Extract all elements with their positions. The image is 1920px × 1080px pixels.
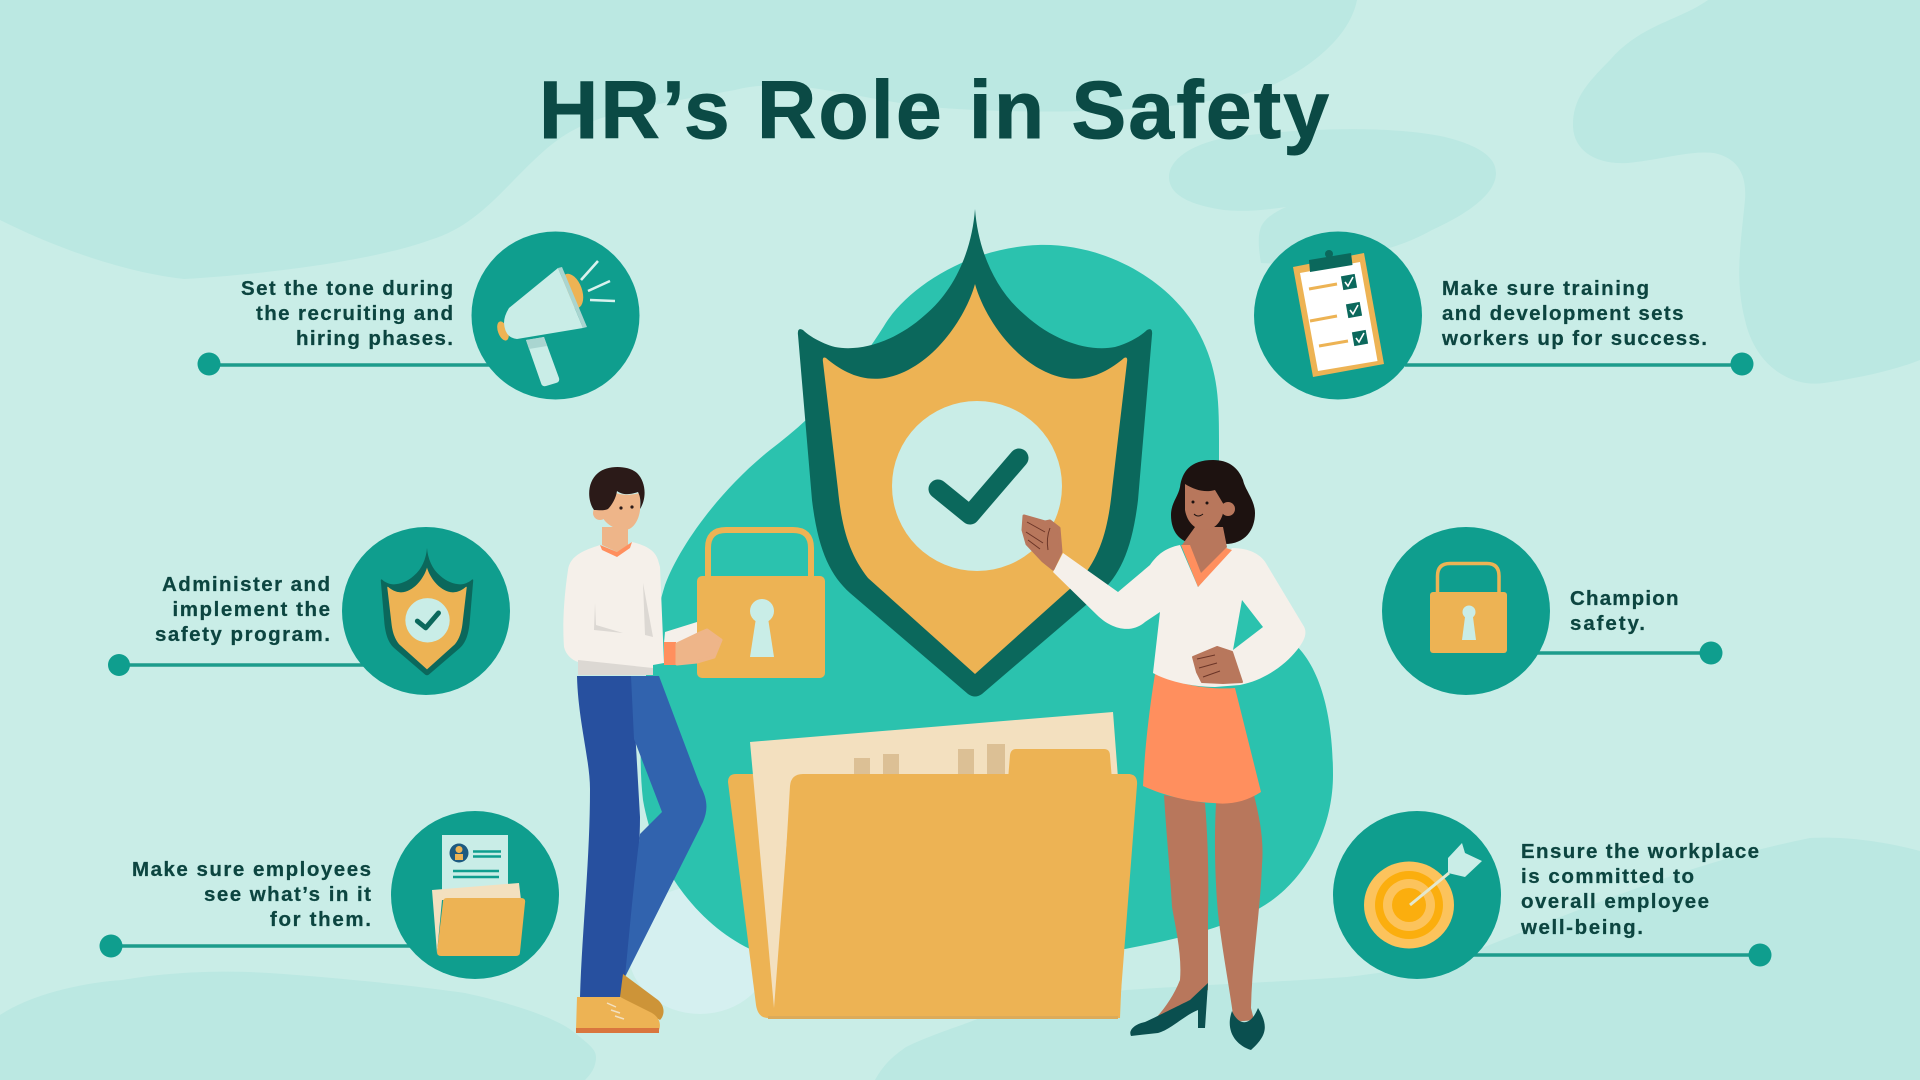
folder bbox=[728, 712, 1137, 1019]
item: set the tone: hiring phases. bbox=[296, 327, 453, 350]
item: training and development: workers up for success. bbox=[1441, 327, 1707, 350]
item: training and development bbox=[1254, 232, 1754, 400]
item: administer safety program: implement the bbox=[172, 598, 330, 621]
item: workplace well-being bbox=[1333, 811, 1772, 979]
item: employees see what's in it bbox=[100, 811, 559, 979]
item: employees see what's in it: see what’s in it bbox=[204, 883, 371, 906]
item: set the tone: the recruiting and bbox=[256, 302, 453, 325]
item: employees see what's in it: for them. bbox=[270, 908, 371, 931]
teal blob behind illustration bbox=[641, 245, 1333, 949]
item: champion safety: safety. bbox=[1570, 612, 1645, 635]
item: set the tone: Set the tone during bbox=[241, 277, 453, 300]
item: employees see what's in it: Make sure employees bbox=[132, 858, 371, 881]
item: workplace well-being: well-being. bbox=[1520, 916, 1643, 939]
item: workplace well-being: overall employee bbox=[1521, 890, 1709, 913]
item: administer safety program: Administer and bbox=[162, 573, 330, 596]
man figure bbox=[563, 467, 721, 1033]
item: champion safety bbox=[1382, 527, 1722, 695]
item: training and development: and development sets bbox=[1442, 302, 1684, 325]
light patch behind man's legs bbox=[628, 886, 772, 1014]
item: workplace well-being: is committed to bbox=[1521, 865, 1694, 888]
item: champion safety: Champion bbox=[1570, 587, 1678, 610]
title: HR’s Role in Safety bbox=[539, 65, 1329, 156]
woman figure bbox=[1023, 460, 1305, 1050]
shield bbox=[798, 209, 1152, 696]
item: administer safety program: safety program. bbox=[155, 623, 330, 646]
item: training and development: Make sure training bbox=[1442, 277, 1649, 300]
item: set the tone bbox=[198, 232, 640, 400]
item: administer safety program bbox=[108, 527, 510, 695]
big padlock bbox=[697, 530, 825, 678]
item: workplace well-being: Ensure the workplace bbox=[1521, 840, 1759, 863]
